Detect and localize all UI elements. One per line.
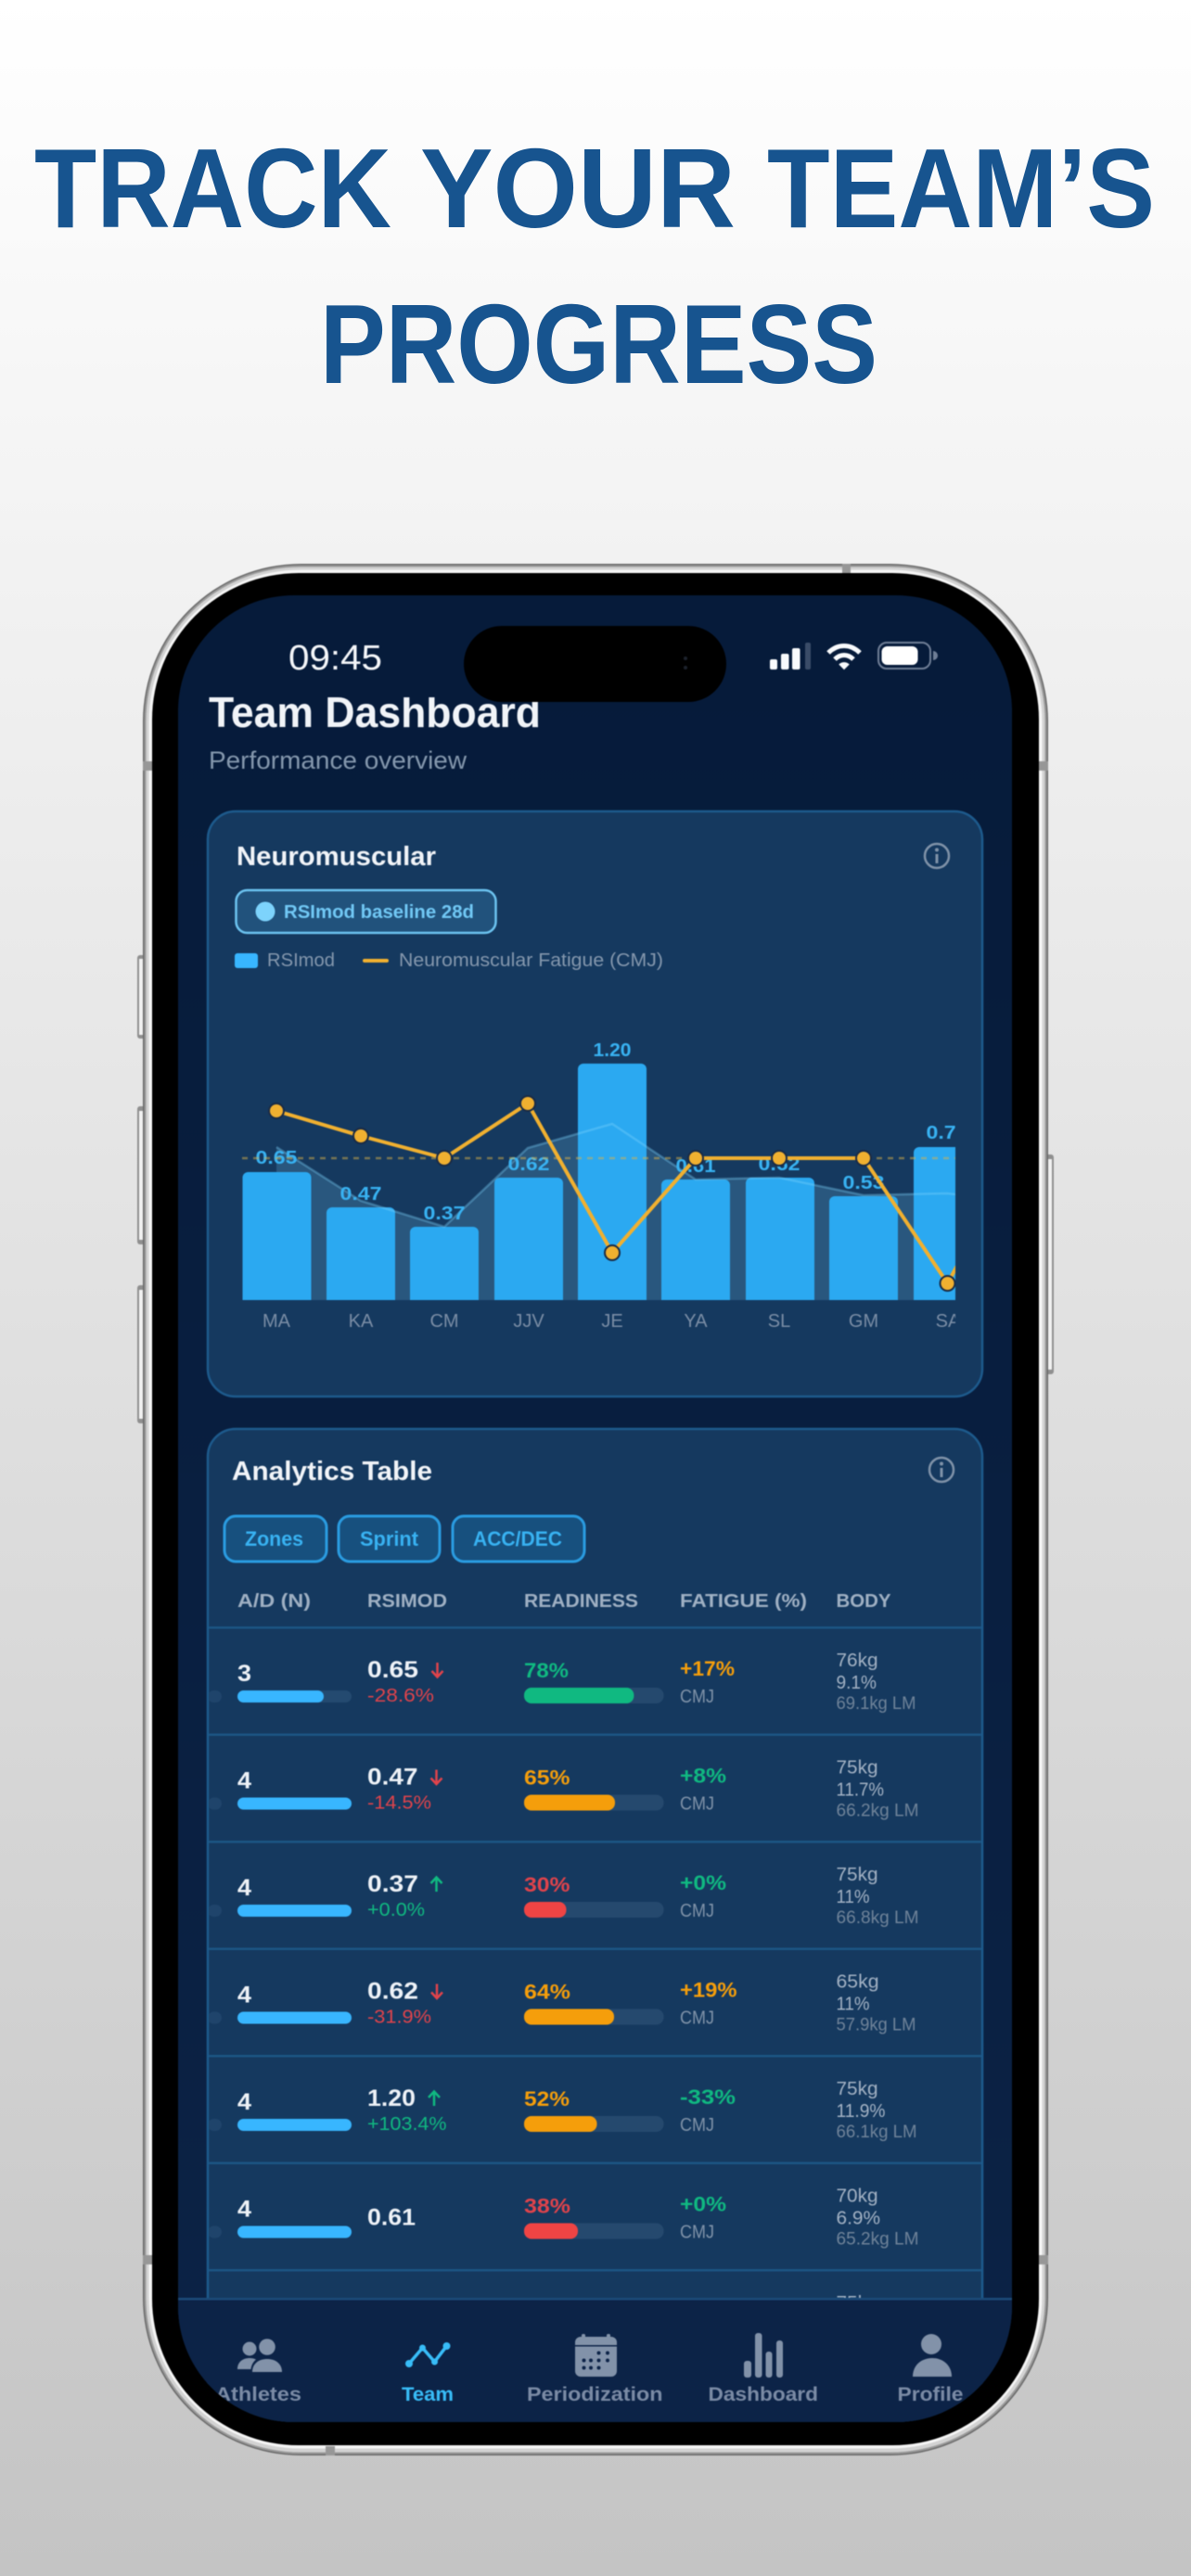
row 3: 0.37 (367, 1871, 418, 1897)
chips: Sprint (360, 1527, 419, 1550)
tab: Dashboard (709, 2333, 818, 2405)
title: TEAM’S (767, 125, 1155, 251)
row 1: 3 (237, 1661, 251, 1687)
panel: Neuromuscular (208, 811, 982, 1396)
x labels: SL (768, 1311, 790, 1332)
average dashed line (242, 1157, 955, 1159)
x labels: GM (849, 1311, 878, 1332)
row 1: CMJ (680, 1687, 714, 1707)
x labels: JJV (513, 1311, 544, 1332)
row 3: +0.0% (367, 1900, 425, 1920)
bar values: 0.47 (339, 1184, 382, 1205)
row 3: CMJ (680, 1901, 714, 1921)
bar values: 0.37 (423, 1204, 466, 1224)
icon: signal (770, 643, 811, 670)
row 6: 4 (237, 2196, 251, 2222)
row 6: CMJ (680, 2222, 714, 2242)
row 1: 9.1% (837, 1673, 877, 1693)
area: baseline (276, 1133, 915, 1300)
row 4: 65kg (837, 1971, 879, 1992)
x labels: CM (429, 1311, 459, 1332)
row 2: 4 (237, 1767, 251, 1793)
x labels: JE (601, 1311, 623, 1332)
row 5 (208, 2079, 916, 2142)
row 5: -33% (680, 2085, 736, 2109)
heading: Team Dashboard: Team Dashboard (209, 688, 541, 736)
heading: Neuromuscular: Neuromuscular (237, 842, 436, 872)
row 6: 38% (524, 2194, 570, 2218)
table header: FATIGUE (%) (680, 1591, 807, 1612)
phone frame (143, 564, 1048, 2455)
row 1: 69.1kg LM (837, 1694, 916, 1714)
bar values: 0.62 (759, 1154, 800, 1175)
title (34, 125, 1155, 407)
row 1: +17% (680, 1657, 735, 1680)
row dividers (208, 1626, 982, 2272)
row 5: 75kg (837, 2079, 877, 2099)
table header (237, 1591, 891, 1612)
table header: BODY (837, 1591, 891, 1612)
row 4: 4 (237, 1983, 251, 2009)
row 6 (208, 2187, 918, 2250)
heading: Analytics Table: Analytics Table (232, 1457, 432, 1486)
x labels: MA (263, 1311, 291, 1332)
bar values: 1.20 (594, 1040, 631, 1061)
row 4: 0.62 (367, 1979, 418, 2005)
row 3: 66.8kg LM (837, 1908, 918, 1928)
row 2: -14.5% (367, 1793, 431, 1814)
tab: Periodization (527, 2334, 662, 2405)
tab: Team (402, 2342, 454, 2405)
chips (224, 1516, 584, 1562)
table rows (208, 1626, 982, 2314)
legend (235, 950, 663, 971)
row 5: 4 (237, 2089, 251, 2115)
tab: Profile: Profile (898, 2384, 963, 2405)
row 1: 78% (524, 1659, 569, 1682)
phone (137, 564, 1054, 2455)
x labels: SA (936, 1311, 961, 1332)
row 1: 76kg (837, 1651, 877, 1671)
x labels: YA (684, 1311, 708, 1332)
row 2 (208, 1758, 918, 1821)
table header: READINESS (524, 1591, 638, 1612)
row 3 (208, 1865, 918, 1928)
row 5: 66.1kg LM (837, 2123, 916, 2142)
row 5: 11.9% (837, 2101, 886, 2122)
row 2: CMJ (680, 1793, 714, 1814)
tab bar (178, 2298, 1012, 2429)
row 4: -31.9% (367, 2007, 431, 2027)
chips: Zones (245, 1527, 303, 1550)
row 1: 0.65 (367, 1657, 418, 1683)
tab: Dashboard: Dashboard (709, 2384, 818, 2405)
bar values (256, 1040, 968, 1224)
tab: Periodization: Periodization (527, 2384, 662, 2405)
chips: ACC/DEC (473, 1527, 562, 1550)
row 3: 75kg (837, 1865, 877, 1885)
row 2: 0.47 (367, 1764, 417, 1790)
chip: RSImod baseline: RSImod baseline 28d (284, 902, 474, 923)
row 6: 6.9% (837, 2209, 880, 2229)
legend: Neuromuscular Fatigue (CMJ) (399, 950, 663, 971)
row 1 (208, 1651, 916, 1714)
fatigue line (276, 1103, 965, 1283)
row 2: 11.7% (837, 1780, 884, 1801)
row 6: 0.61 (367, 2205, 416, 2231)
row 5: +103.4% (367, 2114, 447, 2135)
icon: info (925, 844, 949, 868)
row 7 partial: 75kg (837, 2293, 877, 2314)
row 4: 57.9kg LM (837, 2016, 916, 2034)
row 4: 64% (524, 1981, 570, 2003)
row 4: CMJ (680, 2009, 714, 2029)
bar values: 0.62 (508, 1154, 549, 1175)
tab: Team: Team (402, 2384, 454, 2405)
bar values: 0.53 (842, 1173, 885, 1193)
title: YOUR (420, 125, 736, 251)
row 5: 52% (524, 2087, 570, 2111)
tab: Profile (898, 2334, 963, 2405)
row 1: -28.6% (367, 1686, 434, 1706)
row 2: 65% (524, 1766, 570, 1790)
panel: Analytics Table (206, 1427, 984, 2299)
bar values: 0.61 (675, 1156, 716, 1177)
row 3: +0% (680, 1871, 726, 1894)
side buttons (137, 955, 1054, 1423)
row 4 (208, 1971, 916, 2034)
screen (178, 595, 1012, 2449)
fatigue markers (269, 1096, 955, 1291)
row 2: 66.2kg LM (837, 1801, 918, 1821)
tab: Athletes (215, 2339, 301, 2405)
chart: RSImod bars and fatigue line (242, 1040, 982, 1332)
row 3: 30% (524, 1873, 570, 1896)
bar values: 0.73 (926, 1123, 968, 1143)
icon: wifi (828, 645, 860, 670)
row 4: +19% (680, 1979, 736, 2001)
tab: Athletes: Athletes (215, 2384, 301, 2405)
bars (243, 1064, 982, 1300)
title: PROGRESS (320, 281, 877, 407)
subtitle: Performance overview (209, 746, 467, 774)
icon: battery (878, 643, 938, 669)
row 3: 11% (837, 1887, 870, 1907)
dynamic island (464, 626, 726, 702)
row 3: 4 (237, 1875, 251, 1901)
row 6: +0% (680, 2192, 726, 2216)
bar values: 0.65 (256, 1148, 297, 1168)
row 5: 1.20 (367, 2085, 416, 2111)
table header: RSIMOD (367, 1591, 447, 1612)
row 6: 65.2kg LM (837, 2229, 918, 2250)
row 2: 75kg (837, 1758, 877, 1779)
status bar: time: 09:45 (288, 639, 382, 678)
x labels (263, 1313, 955, 1328)
chip: RSImod baseline (236, 890, 495, 933)
legend: RSImod (267, 950, 335, 971)
row 4: 11% (837, 1994, 870, 2014)
icon: info (929, 1458, 954, 1482)
baseline line (276, 1124, 955, 1227)
x labels: KA (349, 1311, 374, 1332)
row 5: CMJ (680, 2115, 714, 2136)
table header: A/D (N) (237, 1591, 311, 1612)
row 6: 70kg (837, 2187, 877, 2207)
title: TRACK (34, 125, 391, 251)
row 2: +8% (680, 1764, 726, 1788)
